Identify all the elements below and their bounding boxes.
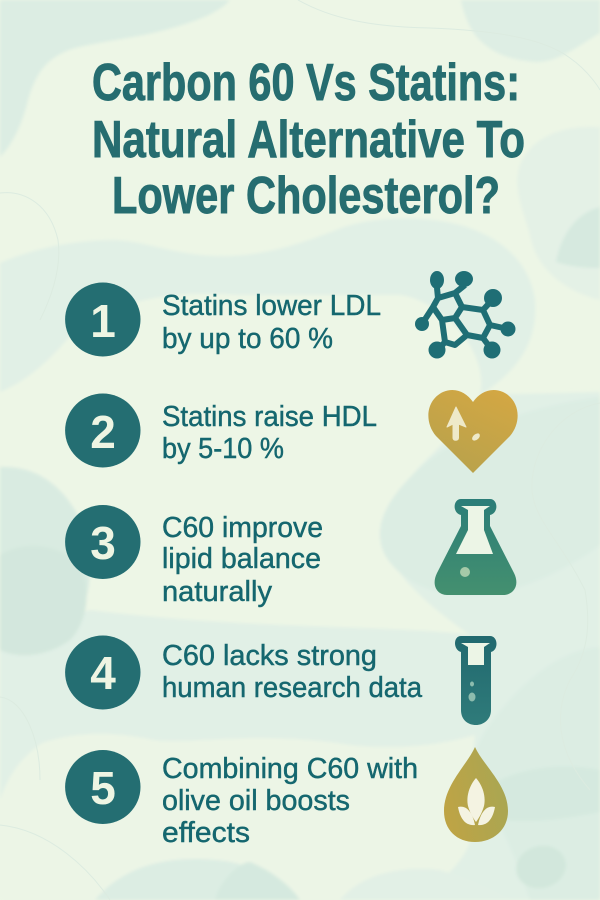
text 4: C60 lacks strong bbox=[162, 640, 377, 672]
text 5: Combining C60 with bbox=[162, 753, 418, 785]
text 3: naturally bbox=[162, 576, 272, 608]
text 1 bbox=[162, 290, 381, 355]
number badge 5 bbox=[65, 750, 140, 824]
item 4 bbox=[65, 636, 497, 725]
number badge 2: 2 bbox=[90, 406, 116, 458]
icon: heart bbox=[428, 390, 518, 473]
number badge 3: 3 bbox=[90, 517, 116, 569]
text 2: by 5-10 % bbox=[162, 433, 284, 465]
text 3: C60 improve bbox=[162, 512, 323, 544]
text 4 bbox=[162, 640, 423, 704]
number badge 1 bbox=[65, 282, 140, 356]
text 5: effects bbox=[162, 817, 250, 849]
icon: molecule bbox=[415, 271, 516, 358]
text 1: by up to 60 % bbox=[162, 323, 333, 355]
text 3 bbox=[162, 512, 323, 608]
item 2 bbox=[65, 390, 518, 473]
text 2 bbox=[162, 401, 377, 465]
icon: oil drop bbox=[444, 747, 508, 842]
text 2: Statins raise HDL bbox=[162, 401, 377, 433]
item 3 bbox=[65, 499, 516, 608]
title: Lower Cholesterol? bbox=[112, 167, 500, 225]
number badge 4 bbox=[65, 636, 140, 710]
number badge 2 bbox=[65, 394, 140, 468]
text 1: Statins lower LDL bbox=[162, 290, 381, 322]
text 4: human research data bbox=[162, 672, 423, 704]
item 1 bbox=[65, 271, 516, 358]
number badge 3 bbox=[65, 505, 140, 579]
text 5: olive oil boosts bbox=[162, 785, 350, 817]
title bbox=[92, 54, 525, 225]
item 5 bbox=[65, 747, 508, 849]
icon: test tube bbox=[455, 636, 497, 725]
number badge 5: 5 bbox=[90, 762, 116, 814]
number badge 1: 1 bbox=[90, 295, 116, 347]
text 3: lipid balance bbox=[162, 543, 321, 575]
text 5 bbox=[162, 753, 418, 849]
number badge 4: 4 bbox=[90, 647, 116, 699]
icon: flask bbox=[435, 499, 516, 595]
